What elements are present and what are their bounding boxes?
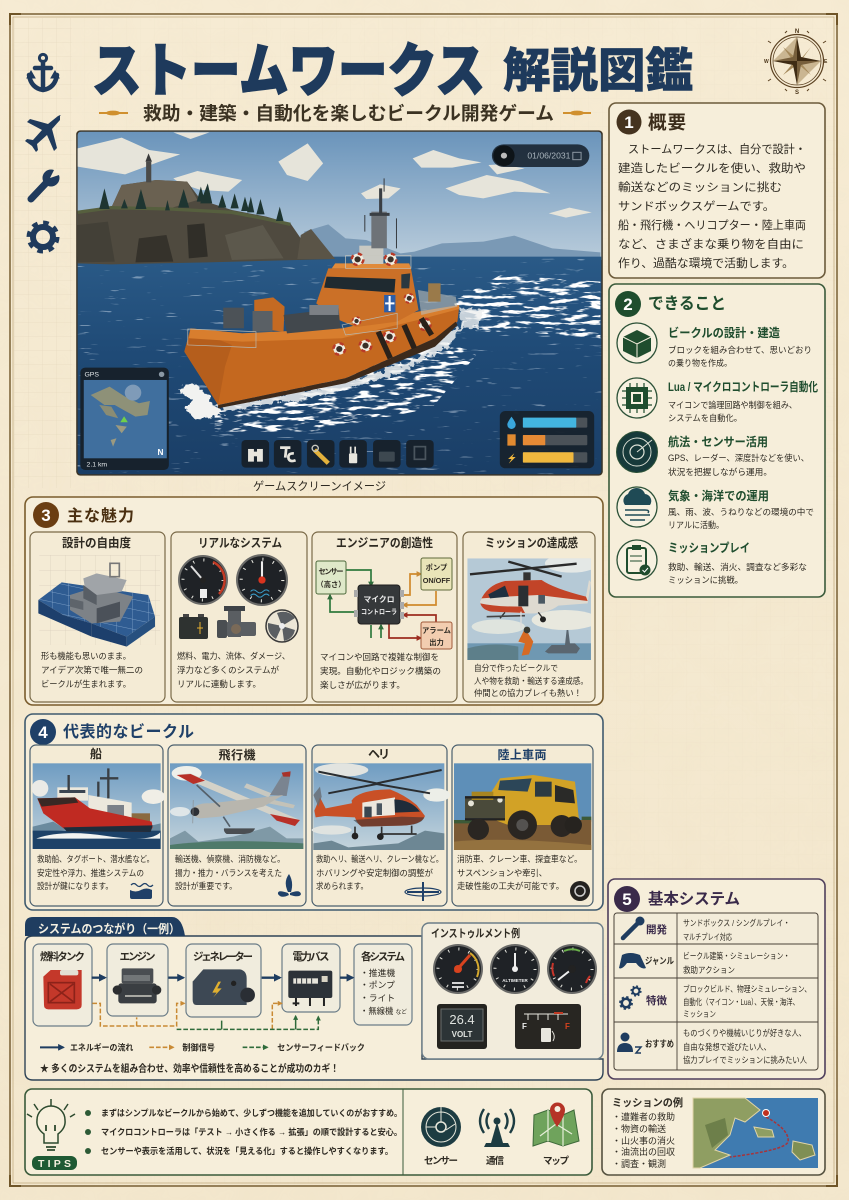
- overview text: [618, 142, 806, 270]
- box: power bus: [282, 944, 340, 1012]
- caption: ゲームスクリーンイメージ: [253, 480, 386, 493]
- badge 5: 5: [622, 890, 632, 909]
- item: weather: [617, 487, 814, 530]
- panel 2: what you can do: [609, 284, 825, 597]
- row: recommended: おすすめ: [645, 1039, 674, 1049]
- card: ship: 船: [90, 746, 102, 761]
- heading: what you can do: できること: [648, 294, 726, 313]
- card: realistic systems: リアルなシステム: [198, 536, 282, 550]
- heading: mission examples: ミッションの例: [612, 1096, 683, 1109]
- item: weather: 風、雨、波、うねりなどの環境の中で: [668, 506, 814, 517]
- circuit diagram: （高さ）: [316, 580, 346, 589]
- helicopter text: ホバリングや安定制御の調整が: [316, 867, 433, 878]
- item: navigation: 航法・センサー活用: [668, 434, 768, 449]
- fuel display: F: [565, 1022, 570, 1031]
- badge 4: [30, 719, 56, 745]
- subtitle: 救助・建築・自動化を楽しむビークル開発ゲーム: [143, 103, 554, 124]
- ship text: 安定性や浮力、推進システムの: [37, 867, 144, 878]
- illustration: yellow truck: [454, 763, 591, 850]
- fan: [266, 610, 298, 642]
- item: vehicle design: ビークルの設計・建造: [668, 325, 780, 340]
- circuit diagram: 出力: [429, 638, 444, 647]
- row: genre: ビークル建築・シミュレーション・: [683, 951, 790, 961]
- card: airplane: 飛行機: [218, 747, 256, 762]
- airplane text: 輸送機、偵察機、消防機など。: [175, 853, 285, 864]
- item: Lua automation: システムを自動化。: [668, 412, 742, 423]
- status bars: [500, 411, 594, 468]
- card: design freedom: 設計の自由度: [62, 535, 131, 550]
- icon: sensor: センサー: [424, 1156, 458, 1167]
- circuit diagram: ON/OFF: [423, 576, 451, 585]
- engineering text: 楽しさが広がります。: [320, 679, 405, 690]
- card: mission achievement: ミッションの達成感: [485, 535, 578, 550]
- icon: communication: 通信: [486, 1155, 504, 1167]
- row: genre: ジャンル: [645, 956, 674, 966]
- row: recommended: 自由な発想で遊びたい人、: [683, 1042, 771, 1052]
- note: ★ 多くのシステムを組み合わせ、効率や信頼性を高めることが成功のカギ！: [40, 1062, 339, 1075]
- realistic systems text: 燃料、電力、流体、ダメージ、: [177, 650, 290, 661]
- energy and signal lines: [92, 978, 353, 1029]
- icon: compass: [764, 29, 828, 96]
- row: development: マルチプレイ対応: [683, 932, 733, 942]
- volt display: [437, 1004, 487, 1049]
- mission list: [612, 1111, 675, 1169]
- game screenshot: [76, 130, 603, 476]
- badge 3: [33, 502, 59, 528]
- gauge: fuel: [178, 555, 228, 605]
- box: each system: ・推進機: [360, 967, 395, 978]
- item: navigation: 状況を把握しながら運用。: [668, 466, 772, 477]
- toolbar: [242, 440, 434, 468]
- panel 3: main appeal: [25, 497, 603, 705]
- icon: compass: N: [795, 29, 799, 35]
- illustration: block vehicle: [38, 555, 160, 647]
- design freedom text: ビークルが生まれます。: [41, 678, 131, 689]
- box: engine: エンジン: [120, 951, 156, 963]
- panel: system connections: [25, 917, 603, 1080]
- game screenshot: GPS: [84, 372, 99, 379]
- icon: plane: [25, 115, 61, 152]
- engineering text: 実現。自動化やロジック構築の: [320, 665, 441, 676]
- legend: エネルギーの流れ: [70, 1041, 134, 1052]
- item: vehicle design: ブロックを組み合わせて、思いどおり: [668, 344, 812, 355]
- item: vehicle design: [617, 323, 812, 368]
- badge 1: [616, 110, 642, 134]
- item: Lua automation: [617, 378, 818, 423]
- instruments panel: インストゥルメント例: [431, 927, 520, 940]
- mission list: ・遭難者の救助: [612, 1111, 675, 1122]
- circuit diagram: センサー: [318, 567, 344, 576]
- icon: compass: S: [795, 90, 799, 96]
- mission map: [693, 1098, 818, 1168]
- box: each system: [354, 944, 412, 1025]
- legend: センサーフィードバック: [277, 1042, 365, 1052]
- row: features: [620, 984, 811, 1019]
- item: navigation: [616, 432, 809, 477]
- card: helicopter: [312, 745, 450, 906]
- gauge: pressure: [547, 944, 597, 994]
- item: missions: [617, 540, 807, 585]
- box: power bus: 電力バス: [292, 950, 330, 963]
- airplane text: 揚力・推力・バランスを考えた: [175, 867, 282, 878]
- legend: [40, 1041, 365, 1052]
- title: 解説図鑑: [503, 44, 693, 97]
- superstructure: [316, 268, 419, 327]
- overview text: など、さまざまな乗り物を自由に: [618, 237, 804, 251]
- circuit diagram: [316, 558, 452, 649]
- land vehicle text: 消防車、クレーン車、探査車など。: [457, 853, 582, 864]
- tips list: マイクロコントローラは「テスト → 小さく作る → 拡張」の順で設計すると安心。: [101, 1126, 402, 1137]
- overview text: 輸送などのミッションに挑む: [618, 180, 782, 194]
- tab heading: システムのつながり（一例）: [38, 921, 180, 936]
- item: vehicle design: の乗り物を作成。: [668, 357, 732, 368]
- design freedom text: [41, 650, 143, 689]
- badge 2: 2: [623, 295, 633, 314]
- card: realistic systems: [171, 532, 307, 702]
- mission text: 人や物を救助・輸送する達成感。: [474, 676, 588, 686]
- icon: light bulb: [27, 1099, 75, 1150]
- game screenshot: N: [157, 448, 164, 457]
- row: recommended: 協力プレイでミッションに挑みたい人: [683, 1055, 808, 1065]
- overview text: 建造したビークルを使い、救助や: [618, 161, 806, 175]
- circuit diagram: ポンプ: [426, 563, 448, 572]
- box: each system: ・ライト: [360, 993, 395, 1003]
- battery: [179, 614, 208, 639]
- fuel display: F: [522, 1022, 527, 1031]
- card: airplane: [168, 745, 306, 906]
- table: [614, 913, 818, 1070]
- icon: rotor: [405, 882, 441, 901]
- land vehicle text: サスペンションや牽引、: [457, 868, 547, 878]
- boat hull: [184, 307, 459, 405]
- overview text: サンドボックスゲームです。: [618, 200, 775, 213]
- icon: sensor: [421, 1107, 461, 1167]
- illustration: seaplane: [170, 763, 303, 849]
- icon: communication: [480, 1109, 514, 1167]
- wake foam: [452, 275, 600, 338]
- item: weather: 気象・海洋での運用: [668, 488, 769, 503]
- title: ストームワークス: [92, 39, 485, 104]
- valve: [217, 606, 256, 638]
- icon: propeller: [278, 874, 301, 897]
- land vehicle text: [457, 853, 582, 891]
- icon: wrench: [31, 168, 62, 199]
- card: engineering creativity: [312, 532, 457, 702]
- mission text: [474, 663, 588, 698]
- box: fuel tank: 燃料タンク: [40, 950, 85, 963]
- realistic systems text: [177, 650, 290, 689]
- island: [78, 180, 335, 264]
- overview text: 船・飛行機・ヘリコプター・陸上車両: [618, 218, 806, 232]
- fuel display: [515, 1004, 581, 1049]
- helicopter text: 求められます。: [316, 880, 368, 891]
- panel: tips: [25, 1089, 592, 1175]
- game screenshot: 2.1 km: [87, 461, 108, 468]
- mission list: ・調査・観測: [612, 1158, 666, 1169]
- card: land vehicle: [452, 745, 593, 906]
- icon: compass: W: [764, 59, 769, 65]
- card: land vehicle: 陸上車両: [498, 747, 546, 762]
- heading: vehicles: 代表的なビークル: [63, 722, 194, 741]
- row: development: 開発: [646, 923, 667, 936]
- overview text: ストームワークスは、自分で設計・: [628, 142, 806, 156]
- tips list: [85, 1107, 402, 1156]
- illustration: helicopter: [312, 763, 450, 850]
- card: helicopter: ヘリ: [368, 747, 390, 761]
- icon: waves: [130, 884, 153, 899]
- icon: compass: E: [824, 59, 828, 65]
- box: generator: [186, 944, 261, 1017]
- item: navigation: GPS、レーダー、深度計などを使い、: [668, 452, 809, 463]
- ship text: 設計が鍵になります。: [37, 880, 113, 891]
- distant mountains: [304, 224, 600, 260]
- card: mission achievement: [463, 532, 598, 702]
- deck equipment: [254, 297, 285, 332]
- card: design freedom: [30, 532, 165, 702]
- instruments panel: [422, 923, 603, 1059]
- badge 2: [615, 291, 641, 317]
- row: features: ミッション: [683, 1009, 716, 1019]
- tab heading: [25, 917, 185, 936]
- tips list: まずはシンプルなビークルから始めて、少しずつ機能を追加していくのがおすすめ。: [101, 1107, 402, 1118]
- gauge: altimeter: ALTIMETER: [502, 978, 528, 983]
- life rings: [333, 343, 345, 355]
- box: generator: ジェネレーター: [193, 951, 253, 963]
- icon: gear: [29, 223, 57, 251]
- row: features: 特徴: [646, 994, 667, 1007]
- circuit diagram: マイクロ: [363, 594, 395, 604]
- item: missions: 救助、輸送、消火、調査など多彩な: [668, 561, 807, 572]
- icon: tire: [570, 881, 590, 901]
- box: fuel tank: [33, 944, 92, 1026]
- gauge: altimeter: [490, 944, 540, 994]
- badge 1: 1: [624, 113, 634, 132]
- panel 5: basic system: [608, 879, 825, 1079]
- row: genre: 救助アクション: [683, 965, 735, 975]
- item: Lua automation: マイコンで論理回路や制御を組み、: [668, 399, 797, 410]
- legend: 制御信号: [182, 1041, 215, 1052]
- illustration: red ship: [32, 763, 165, 849]
- item: weather: リアルに活動。: [668, 519, 724, 530]
- game screenshot: 01/06/2031: [527, 151, 571, 161]
- design freedom text: アイデア次第で唯一無二の: [41, 664, 143, 675]
- mission list: ・物資の輸送: [612, 1123, 666, 1134]
- icon: anchor: [27, 54, 59, 90]
- mission list: ・油流出の回収: [612, 1146, 675, 1157]
- row: development: [623, 916, 790, 942]
- badge 5: [614, 886, 640, 912]
- panel: mission examples: [602, 1089, 825, 1175]
- item: missions: ミッションプレイ: [668, 541, 750, 555]
- box: each system: 各システム: [361, 950, 405, 963]
- GPS HUD: [80, 368, 169, 470]
- heading: basic system: 基本システム: [648, 890, 740, 908]
- realistic systems text: リアルに連動します。: [177, 678, 261, 689]
- overview text: 作り、過酷な環境で活動します。: [618, 256, 794, 270]
- icon: map: [533, 1103, 579, 1167]
- badge 4: 4: [38, 723, 48, 742]
- box: each system: ・ポンプ: [360, 980, 395, 990]
- panel 1: overview: [609, 103, 825, 278]
- gauge: depth: [236, 554, 288, 606]
- row: genre: [619, 951, 790, 975]
- tips list: センサーや表示を活用して、状況を「見える化」すると操作しやすくなります。: [101, 1145, 393, 1156]
- heading: overview: 概要: [648, 112, 686, 133]
- TIPS pill: [32, 1156, 77, 1170]
- badge 3: 3: [41, 506, 51, 525]
- panel 4: vehicles: [25, 714, 603, 910]
- card: ship: [30, 745, 165, 906]
- row: development: サンドボックス / シングルプレイ・: [683, 918, 790, 928]
- row: features: 自動化（マイコン・Lua）、天候・海洋、: [683, 997, 799, 1007]
- circuit diagram: アラーム: [422, 626, 451, 635]
- engineering text: マイコンや回路で複雑な制御を: [320, 651, 439, 662]
- box: engine: [107, 944, 168, 1016]
- land vehicle text: 走破性能の工夫が可能です。: [457, 880, 564, 891]
- card: engineering creativity: エンジニアの創造性: [336, 535, 433, 550]
- sea: [78, 257, 601, 475]
- airplane text: [175, 853, 285, 891]
- heading: main appeal: 主な魅力: [67, 506, 134, 525]
- icon: map: マップ: [543, 1156, 569, 1167]
- helicopter text: [316, 853, 443, 891]
- box: each system: ・無線機 など: [360, 1005, 407, 1016]
- date HUD: [492, 144, 589, 167]
- row: recommended: [617, 1028, 808, 1065]
- mission list: ・山火事の消火: [612, 1135, 675, 1146]
- engineering text: [320, 651, 441, 690]
- ship text: [37, 853, 154, 891]
- realistic systems text: 浮力など多くのシステムが: [177, 664, 279, 675]
- volt display: 26.4: [449, 1012, 475, 1027]
- row: recommended: ものづくりや機械いじりが好きな人、: [683, 1028, 806, 1038]
- design freedom text: 形も機能も思いのまま。: [41, 650, 131, 661]
- airplane text: 設計が重要です。: [175, 880, 237, 891]
- TIPS pill: TIPS: [38, 1158, 71, 1170]
- circuit diagram: コントローラ: [361, 608, 397, 616]
- item: missions: ミッションに挑戦。: [668, 574, 743, 585]
- gauge: speed: [433, 944, 483, 994]
- mission text: 自分で作ったビークルで: [474, 663, 558, 673]
- helicopter text: 救助ヘリ、輸送ヘリ、クレーン機など。: [316, 853, 443, 864]
- ship text: 救助船、タグボート、潜水艦など。: [37, 853, 154, 864]
- mission text: 仲間との協力プレイも熱い！: [474, 688, 582, 698]
- clouds: [78, 132, 592, 218]
- volt display: VOLT: [452, 1030, 472, 1039]
- illustration: rescue helicopter: [467, 554, 598, 660]
- row: features: ブロックビルド、物理シミュレーション、: [683, 984, 811, 994]
